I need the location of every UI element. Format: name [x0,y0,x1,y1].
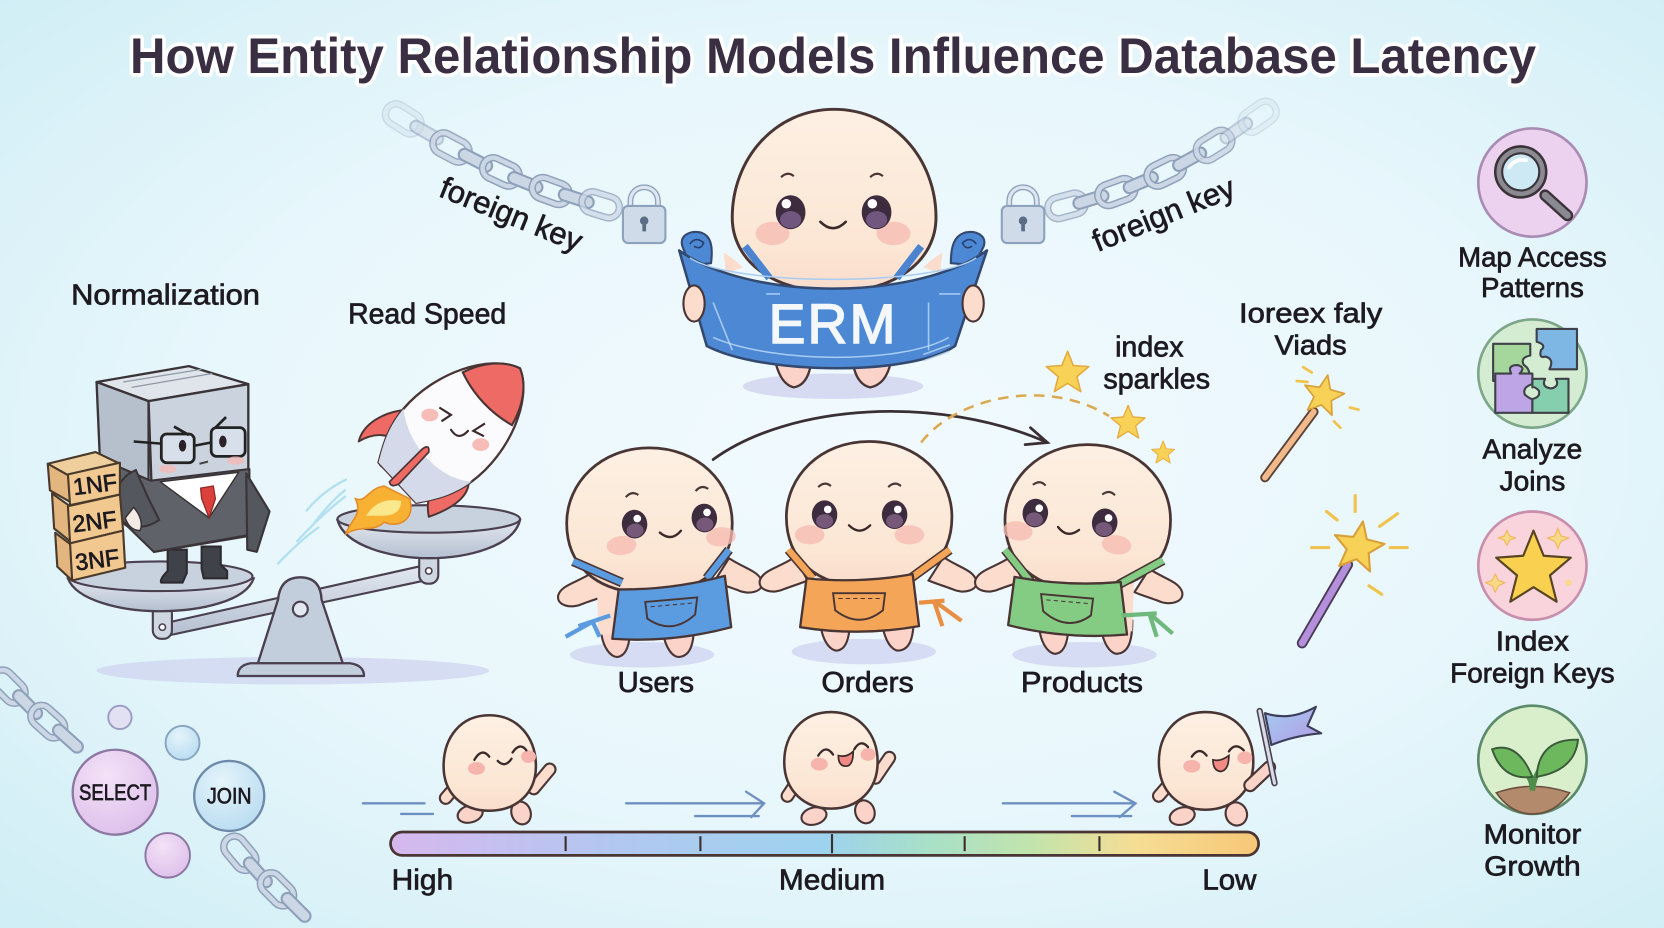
label: Users: Users [618,667,694,699]
step: Analyze Joins [1478,319,1587,496]
box: 1NF: 1NF [72,469,119,500]
label: garbled wand caption: Ioreex faly [1239,298,1382,329]
bubble: SELECT [73,750,158,835]
character: ERM mascot with blueprint scroll [679,109,987,399]
bubble: JOIN [194,761,264,831]
chain: foreign key right [1045,97,1280,221]
label: garbled wand caption: Viads [1275,329,1347,360]
icon: sprout [1478,706,1587,814]
chain: lower-left upper [0,666,85,755]
icon: padlock left [623,187,665,243]
label: Normalization: Normalization [71,280,260,312]
arrow: Users to Products relationship [713,411,1047,460]
label: Foreign Keys [1450,657,1615,688]
hands holding scroll [683,285,984,322]
balance scale [68,505,520,684]
character: Products [975,445,1182,668]
title: How Entity Relationship Models Influence Database Latency [130,28,1536,84]
chain: lower-left lower [219,832,313,924]
scroll label: ERM: ERM [769,293,898,355]
label: Monitor [1484,819,1581,850]
glasses and face [134,417,245,473]
label: Joins [1500,465,1565,496]
apron tie [1122,613,1173,637]
apron straps [1005,550,1163,585]
label: foreign key left: foreign key [435,170,588,259]
label: High: High [392,864,453,896]
label: foreign key right: foreign key [1087,170,1240,259]
character: Orders [760,441,977,664]
index sparkle stars [1046,351,1175,463]
step: Map Access Patterns [1458,128,1607,303]
label: Orders: Orders [821,667,914,699]
speed lines and arrows [363,792,1136,817]
label: Medium: Medium [779,864,885,896]
label: index sparkles: index [1115,332,1184,364]
apron tie [566,616,610,637]
bubbles [73,706,264,878]
character: low latency runner with flag [1159,707,1321,829]
character: medium latency runner [784,712,889,828]
scroll curls [682,232,984,265]
label: Growth [1484,851,1581,882]
step: Index Foreign Keys [1450,512,1615,688]
icon: purple magic wand [1302,496,1407,643]
icon: star [1478,512,1587,620]
label: Read Speed: Read Speed [348,299,506,331]
right pan [337,505,520,584]
label: Patterns [1481,272,1584,303]
label: index sparkles: sparkles [1103,363,1210,395]
character: high latency runner [444,715,550,827]
character: Users [558,448,762,668]
scale stand [238,577,364,676]
box: 2NF [52,493,123,543]
label: Low: Low [1202,864,1257,896]
bubble: SELECT: SELECT [79,780,152,805]
icon: puzzle pieces [1478,319,1587,428]
label: Products: Products [1021,667,1143,699]
icon: padlock right [1002,187,1044,243]
scale beam [161,565,430,637]
icon: flag [1260,707,1321,783]
icon: magnifying glass [1478,128,1587,237]
latency progress bar [391,832,1259,855]
icon: tan magic wand [1265,367,1358,478]
box: 3NF: 3NF [74,544,121,575]
apron straps [573,550,729,583]
motion lines: rocket [278,480,346,564]
label: Analyze [1483,433,1582,464]
bubble: JOIN: JOIN [207,783,252,808]
box: 1NF [48,452,120,505]
box: 3NF [55,531,125,580]
suit jacket [119,467,249,552]
icon: rocket [346,331,554,534]
arrow: dashed index path [921,395,1109,443]
left pan [68,561,254,639]
apron straps [788,550,950,578]
chain: foreign key left [381,100,622,221]
character: database server in suit [48,366,270,583]
apron tie [919,601,961,626]
label: Map Access [1458,241,1607,272]
box: 2NF: 2NF [71,506,118,537]
label: Index [1496,626,1569,657]
step: Monitor Growth [1478,706,1587,882]
